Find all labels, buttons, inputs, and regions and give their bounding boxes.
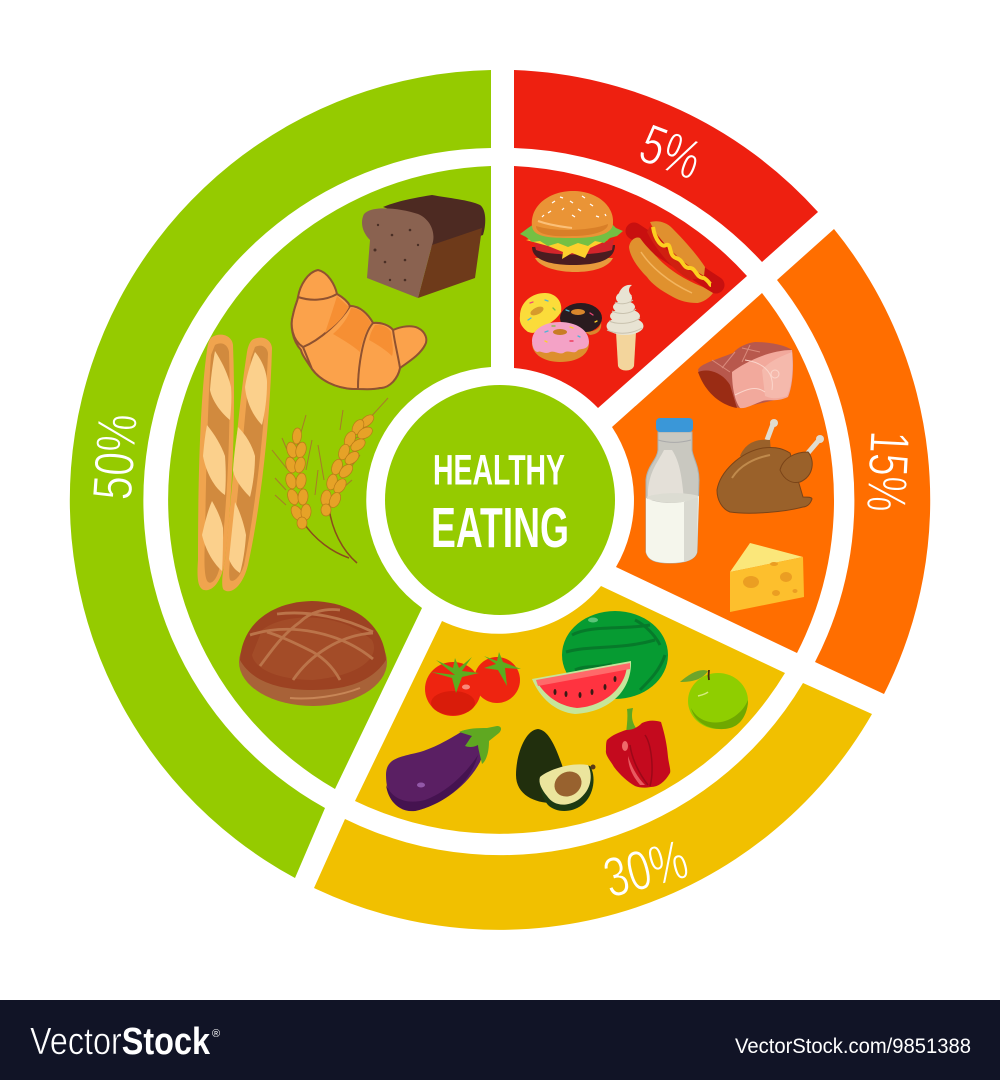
icon: round brown bread (239, 601, 387, 706)
outer ring segment: grains 50% (70, 70, 491, 878)
inner wedge: protein and dairy (612, 293, 834, 653)
icon: tomatoes (425, 652, 521, 716)
label: 30%: 30% (597, 827, 694, 910)
left baguette (198, 335, 234, 590)
icon: rye loaf (362, 195, 485, 298)
chart: food pyramid wheel (70, 70, 930, 930)
icon: baguettes (198, 335, 272, 591)
icon: red pepper (606, 708, 670, 788)
icon: cheese (730, 543, 804, 612)
icon: ice cream cone (606, 285, 644, 370)
icon: eggplant (386, 726, 501, 811)
watermark url: VectorStock.com/9851388 (735, 1035, 971, 1058)
icon: green apple (680, 670, 748, 729)
icon: ham (698, 342, 793, 408)
inner wedge: grains (168, 166, 491, 789)
label: 5%: 5% (632, 111, 710, 192)
icon: croissant (292, 270, 426, 389)
icon: milk bottle (646, 418, 699, 563)
outer ring segment: protein and dairy 15% (777, 229, 930, 694)
outer ring segment: fast food 5% (514, 70, 818, 262)
right baguette (222, 338, 272, 591)
icon: hot dog (629, 221, 716, 303)
inner wedge: fruit and vegetables (355, 586, 785, 834)
watermark registered mark: ® (212, 1028, 220, 1040)
title: eating: EATING (431, 496, 569, 560)
center circle with title (385, 385, 615, 615)
label: 15%: 15% (855, 429, 922, 514)
label: 50%: 50% (80, 412, 149, 502)
title: healthy: HEALTHY (433, 446, 565, 494)
icon: roast turkey (717, 419, 824, 513)
inner wedge: fast food (514, 166, 747, 408)
icon: donuts (520, 293, 602, 362)
icon: avocado (516, 729, 596, 811)
watermark logo: VectorStock (30, 1021, 211, 1063)
icon: burger (520, 191, 623, 272)
outer ring segment: fruit and vegetables 30% (314, 683, 872, 930)
icon: wheat ears (272, 398, 388, 563)
footer bar (0, 1000, 1000, 1080)
icon: watermelon (532, 611, 668, 714)
